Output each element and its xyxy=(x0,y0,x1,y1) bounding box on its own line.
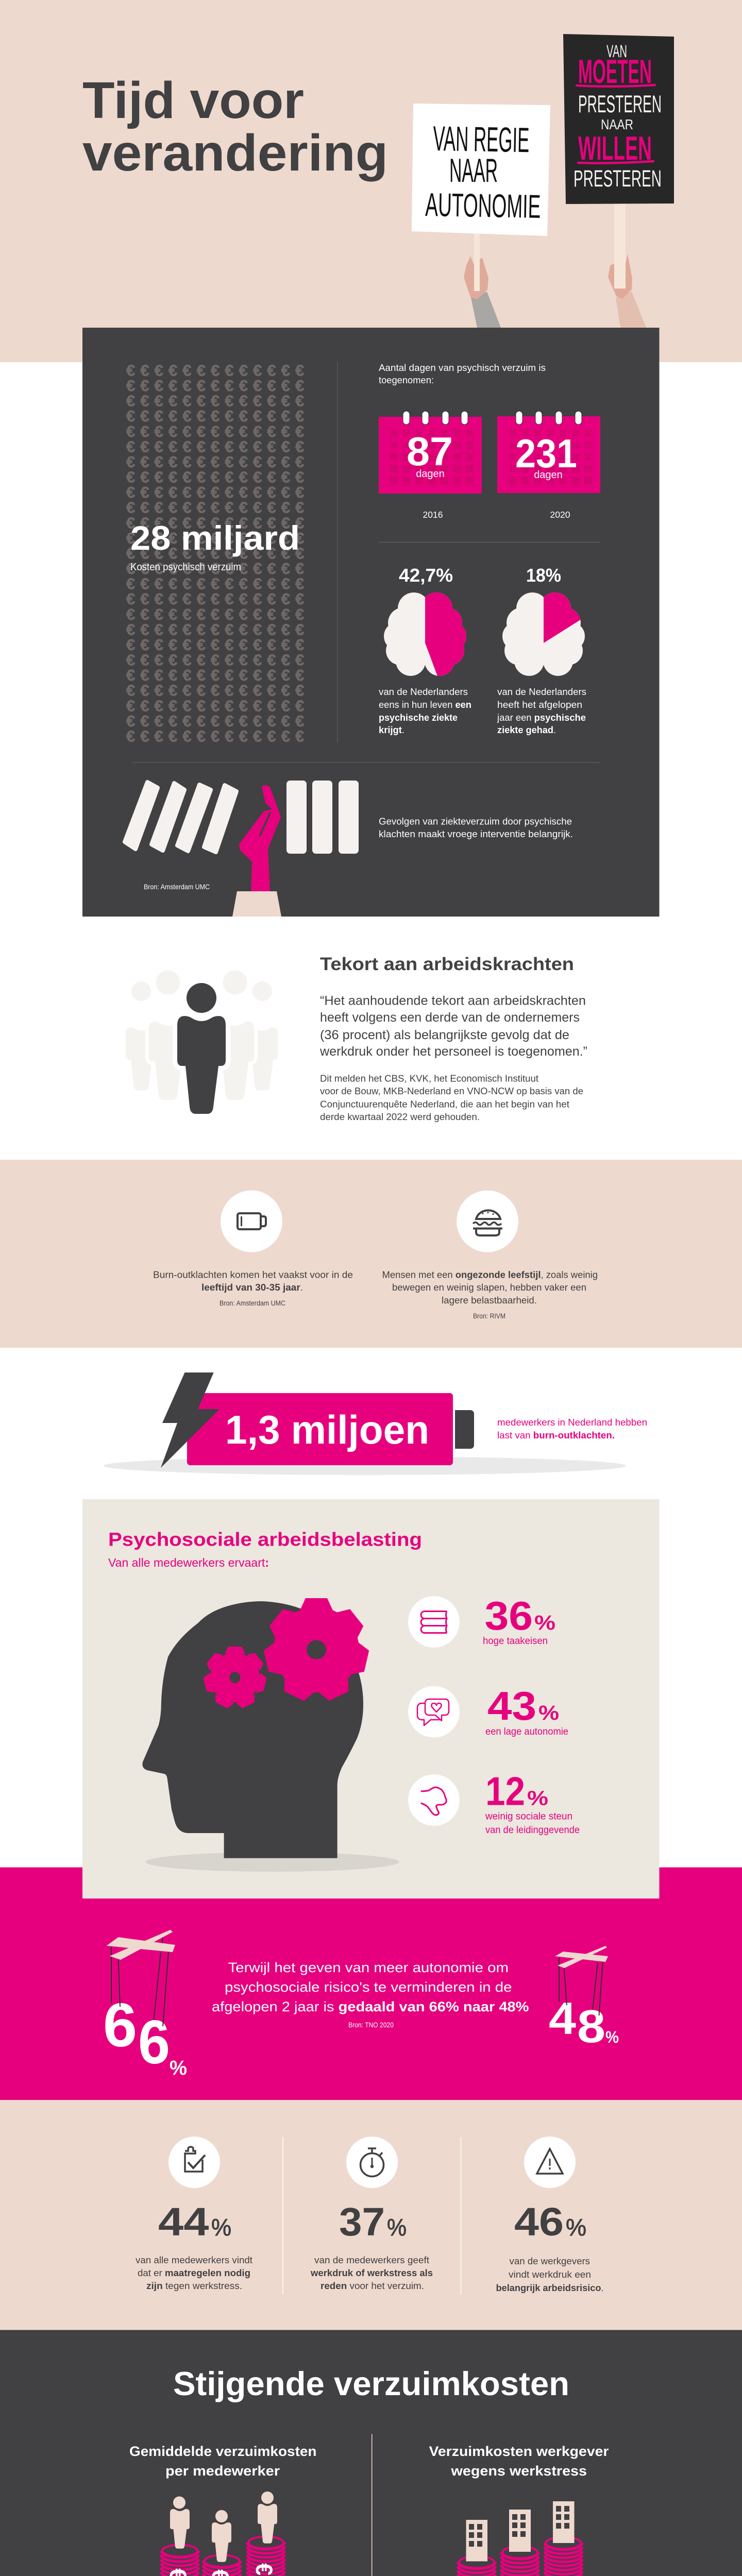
stat: 36% hoge taakeisen: % xyxy=(534,1612,555,1634)
euro pattern: €€€€€€€€€€€€€ xyxy=(126,529,309,547)
calendar years: 2020 xyxy=(550,510,570,520)
small gear xyxy=(203,1647,267,1710)
euro pattern: €€€€€€€€€€€€€ xyxy=(126,422,309,440)
heading: psychosociale arbeidsbelasting: Van alle medewerkers ervaart: xyxy=(108,1556,269,1569)
heading: psychosociale arbeidsbelasting xyxy=(108,1529,422,1569)
header background xyxy=(0,0,742,362)
euro pattern: €€€€€€€€€€€€€ xyxy=(126,682,309,700)
text: gevolgen xyxy=(379,816,573,839)
marionette: 48% xyxy=(549,1946,619,2053)
sign sticks xyxy=(474,204,626,291)
panel: stijgende verzuimkosten xyxy=(0,2330,742,2576)
dark sign xyxy=(563,34,674,204)
euro pattern: €€€€€€€€€€€€€ xyxy=(126,499,309,517)
dark sign: NAAR xyxy=(601,116,633,132)
marionette: 48%: 8 xyxy=(577,2001,605,2053)
euro pattern: €€€€€€€€€€€€€ xyxy=(126,697,309,715)
stat: 37% werkdruk: werkdruk of werkstress als xyxy=(310,2268,433,2278)
heading: kosten werkgever: Verzuimkosten werkgever xyxy=(429,2444,609,2459)
text: autonomie: afgelopen 2 jaar is gedaald van 66% naar 48% xyxy=(212,1999,529,2014)
band: burn-out en leefstijl xyxy=(0,1160,742,1348)
stat: 44% maatregelen: 44 xyxy=(158,2200,209,2244)
cuff xyxy=(232,891,281,917)
stat: 46% arbeidsrisico: 46 xyxy=(514,2200,564,2244)
text: burn-outklachten xyxy=(497,1417,647,1440)
euro pattern xyxy=(126,362,309,745)
icon: books xyxy=(421,1612,447,1633)
text: autonomie xyxy=(212,1960,529,2029)
source: amsterdam umc: Bron: Amsterdam UMC xyxy=(144,883,210,891)
heading: Tekort aan arbeidskrachten xyxy=(320,954,574,974)
brain chart 18% xyxy=(497,569,586,735)
lightning bolt xyxy=(161,1372,220,1468)
euro pattern: €€€€€€€€€€€€€ xyxy=(126,544,309,563)
brain chart 18%: 18% xyxy=(526,565,561,586)
heading: psychosociale arbeidsbelasting: Psychosociale arbeidsbelasting xyxy=(108,1529,422,1550)
euro pattern: €€€€€€€€€€€€€ xyxy=(126,575,309,593)
title xyxy=(82,72,388,182)
white sign: VAN REGIE xyxy=(433,119,530,160)
euro pattern: €€€€€€€€€€€€€ xyxy=(126,468,309,486)
stat: 12% weinig sociale steun xyxy=(408,1768,580,1836)
text: aantal dagen xyxy=(379,363,546,385)
text: autonomie: psychosociale risico's te verminderen in de xyxy=(225,1979,512,1995)
heading: kosten werkgever: wegens werkstress xyxy=(450,2463,587,2479)
brain chart 18%: van de Nederlanders xyxy=(497,687,586,697)
right arm and hand xyxy=(608,254,646,328)
euro pattern: €€€€€€€€€€€€€ xyxy=(126,620,309,638)
icon: building xyxy=(509,2510,531,2552)
stat: 36% hoge taakeisen: 36 xyxy=(484,1593,533,1638)
big gear xyxy=(262,1598,370,1703)
euro pattern: €€€€€€€€€€€€€ xyxy=(126,560,309,578)
chart: coin stack 2016 werkgever xyxy=(458,2520,495,2576)
stat: 36% hoge taakeisen: hoge taakeisen xyxy=(483,1636,548,1647)
stat: 12% weinig sociale steun: 12 xyxy=(485,1768,525,1814)
euro pattern: €€€€€€€€€€€€€ xyxy=(126,651,309,669)
value: 1,3 miljoen xyxy=(225,1407,429,1452)
stat: 44% maatregelen xyxy=(136,2137,252,2291)
stat: 37% werkdruk: van de medewerkers geeft xyxy=(314,2255,429,2265)
stat: 12% weinig sociale steun: % xyxy=(527,1787,548,1809)
stat: 44% maatregelen: van alle medewerkers vindt xyxy=(136,2255,252,2265)
body text: Dit melden het CBS, KVK, het Economisch Instituut xyxy=(320,1073,538,1084)
body text: derde kwartaal 2022 werd gehouden. xyxy=(320,1111,480,1122)
stat: 37% werkdruk: 37 xyxy=(339,2200,385,2244)
quote: (36 procent) als belangrijkste gevolg dat de xyxy=(320,1028,569,1042)
card: ongezonde leefstijl: lagere belastbaarheid. xyxy=(442,1295,537,1306)
illustration: burn-out battery xyxy=(104,1372,626,1475)
stat: 43% lage autonomie xyxy=(408,1683,568,1737)
stat: 46% arbeidsrisico: belangrijk arbeidsrisico. xyxy=(496,2283,604,2293)
title: Tijd voor xyxy=(82,72,304,129)
euro pattern: €€€€€€€€€€€€€ xyxy=(126,407,309,425)
card: ongezonde leefstijl: bewegen en weinig slapen, hebben vaker een xyxy=(392,1282,586,1293)
text: aantal dagen: Aantal dagen van psychisch verzuim is xyxy=(379,363,546,373)
battery body xyxy=(187,1393,453,1465)
euro pattern: €€€€€€€€€€€€€ xyxy=(126,483,309,501)
icon: building xyxy=(466,2520,487,2562)
card: burn-out leeftijd: leeftijd van 30-35 jaar . xyxy=(201,1282,303,1293)
icon: thumb down xyxy=(421,1787,446,1815)
card: ongezonde leefstijl xyxy=(382,1190,598,1320)
band: magenta xyxy=(0,1867,742,2100)
text: aantal dagen: toegenomen: xyxy=(379,375,434,385)
euro pattern: €€€€€€€€€€€€€ xyxy=(126,605,309,623)
chart: coin stack 2018 medewerker xyxy=(247,2492,284,2576)
euro pattern: €€€€€€€€€€€€€ xyxy=(126,590,309,608)
white sign xyxy=(412,104,550,236)
card: burn-out leeftijd xyxy=(153,1190,353,1307)
calendar years xyxy=(423,510,570,520)
stat: 12% weinig sociale steun: weinig sociale steun xyxy=(485,1811,572,1822)
calendar 2016: dagen xyxy=(416,468,445,480)
icon: chat bubbles with heart xyxy=(417,1699,449,1725)
section: tekort aan arbeidskrachten xyxy=(319,954,587,1122)
stat: 28 miljard xyxy=(130,519,300,573)
marionette: 48%: % xyxy=(605,2028,619,2046)
quote: werkdruk onder het personeel is toegenomen.” xyxy=(319,1044,587,1059)
text: burn-outklachten: medewerkers in Nederland hebben xyxy=(497,1417,647,1428)
brain chart 42,7%: psychische ziekte xyxy=(379,713,458,723)
shadow xyxy=(104,1456,626,1475)
heading: kosten per medewerker xyxy=(129,2444,316,2479)
brain chart 18%: ziekte gehad. xyxy=(497,725,556,735)
stat: 46% arbeidsrisico: % xyxy=(566,2214,586,2241)
stat: 44% maatregelen: % xyxy=(211,2214,231,2241)
card: burn-out leeftijd: Bron: Amsterdam UMC xyxy=(220,1299,285,1307)
text: autonomie: Terwijl het geven van meer autonomie om xyxy=(228,1960,509,1975)
hand xyxy=(240,786,280,891)
calendar 2016 xyxy=(379,411,482,494)
stat: 37% werkdruk: % xyxy=(387,2214,407,2241)
chart: coin stack 2017 medewerker xyxy=(203,2510,240,2576)
chart: coin stack 2016 medewerker xyxy=(161,2497,198,2576)
stat: 43% lage autonomie: % xyxy=(538,1702,559,1724)
brain chart 18%: heeft het afgelopen xyxy=(497,700,582,710)
text: gevolgen: klachten maakt vroege interventie belangrijk. xyxy=(379,829,573,839)
stat: 43% lage autonomie: 43 xyxy=(487,1683,536,1728)
calendar 2020 xyxy=(497,411,600,493)
euro pattern: €€€€€€€€€€€€€ xyxy=(126,377,309,395)
panel: psychisch verzuim xyxy=(82,328,660,917)
body text xyxy=(320,1073,583,1122)
card: burn-out leeftijd: Burn-outklachten komen het vaakst voor in de xyxy=(153,1269,353,1280)
stat: 43% lage autonomie: een lage autonomie xyxy=(485,1726,568,1737)
title: verandering xyxy=(82,124,388,182)
dark sign: PRESTEREN xyxy=(578,90,662,117)
dark sign: PRESTEREN xyxy=(574,165,662,192)
euro pattern: €€€€€€€€€€€€€ xyxy=(126,453,309,471)
white sign: NAAR xyxy=(449,151,498,189)
stat: 46% arbeidsrisico: van de werkgevers xyxy=(509,2256,590,2266)
heading: kosten per medewerker: Gemiddelde verzuimkosten xyxy=(129,2444,316,2459)
marionette: 66%: 6 xyxy=(138,2008,170,2077)
icon: building xyxy=(553,2501,574,2543)
euro pattern: €€€€€€€€€€€€€ xyxy=(126,636,309,654)
brain chart 42,7%: van de Nederlanders xyxy=(379,687,468,697)
euro pattern: €€€€€€€€€€€€€ xyxy=(126,727,309,745)
stat: 12% weinig sociale steun: van de leidinggevende xyxy=(485,1825,580,1836)
quote: “Het aanhoudende tekort aan arbeidskrachten xyxy=(320,993,586,1008)
dark sign: VAN xyxy=(606,42,627,61)
icon: group of people xyxy=(126,971,278,1114)
panel: psychosociale arbeidsbelasting xyxy=(82,1499,660,1899)
left arm and hand xyxy=(464,256,501,328)
heading: stijgende verzuimkosten: Stijgende verzuimkosten xyxy=(173,2365,569,2402)
battery nub xyxy=(455,1410,474,1449)
text: burn-outklachten: last van burn-outklachten. xyxy=(497,1430,615,1440)
stat: 28 miljard: Kosten psychisch verzuim xyxy=(130,562,241,573)
white sign: AUTONOMIE xyxy=(425,186,541,225)
body text: Conjunctuurenquête Nederland, die aan het begin van het xyxy=(320,1098,569,1110)
stat: 46% arbeidsrisico xyxy=(496,2137,604,2293)
brain chart 42,7%: eens in hun leven een xyxy=(379,700,471,710)
quote: heeft volgens een derde van de ondernemers xyxy=(320,1010,580,1025)
icon: warning triangle xyxy=(537,2149,563,2174)
marionette: 66% xyxy=(103,1930,187,2079)
euro pattern: €€€€€€€€€€€€€ xyxy=(126,437,309,455)
brain chart 42,7%: krijgt. xyxy=(379,725,404,735)
card: ongezonde leefstijl: Bron: RIVM xyxy=(473,1312,505,1320)
illustration: head with gears xyxy=(142,1598,399,1872)
illustration: dominoes with hand xyxy=(125,781,359,917)
body text: voor de Bouw, MKB-Nederland en VNO-NCW op basis van de xyxy=(320,1086,583,1096)
euro pattern: €€€€€€€€€€€€€ xyxy=(126,514,309,532)
quote xyxy=(319,993,587,1059)
calendar 2020: dagen xyxy=(534,469,563,481)
chart: coin stack 2018 werkgever xyxy=(545,2501,582,2576)
icon: clipboard xyxy=(185,2147,205,2172)
text: autonomie: Bron: TNO 2020 xyxy=(348,2021,394,2029)
heading: kosten per medewerker: per medewerker xyxy=(165,2463,280,2479)
brain chart 42,7% xyxy=(379,569,471,735)
brain chart 42,7%: 42,7% xyxy=(399,565,453,586)
falling dominoes xyxy=(125,782,237,852)
text: gevolgen: Gevolgen van ziekteverzuim door psychische xyxy=(379,816,572,826)
marionette: 66%: % xyxy=(170,2057,187,2079)
band: werkstress xyxy=(0,2100,742,2330)
icon: stopwatch xyxy=(361,2148,383,2176)
protest signs with hands xyxy=(412,34,674,328)
stat: 44% maatregelen: zijn tegen werkstress. xyxy=(146,2281,242,2291)
card: ongezonde leefstijl: Mensen met een ongezonde leefstijl, zoals weinig xyxy=(382,1269,598,1280)
chart: coin stack 2017 werkgever xyxy=(501,2510,538,2576)
marionette: 48%: 4 xyxy=(549,1993,576,2044)
stat: 37% werkdruk: reden voor het verzuim. xyxy=(321,2281,424,2291)
stat: 37% werkdruk xyxy=(310,2137,433,2291)
stat: 46% arbeidsrisico: vindt werkdruk een xyxy=(509,2269,591,2280)
calendar years: 2016 xyxy=(423,510,443,520)
heading: kosten werkgever xyxy=(429,2444,609,2479)
euro pattern: €€€€€€€€€€€€€ xyxy=(126,712,309,730)
brain chart 18%: jaar een psychische xyxy=(497,713,586,723)
stat: 28 miljard: 28 miljard xyxy=(130,519,300,557)
icon: burger xyxy=(473,1210,502,1235)
stat: 36% hoge taakeisen xyxy=(408,1593,555,1648)
euro pattern: €€€€€€€€€€€€€ xyxy=(126,666,309,684)
euro pattern: €€€€€€€€€€€€€ xyxy=(126,392,309,410)
dark sign: MOETEN xyxy=(578,53,652,90)
upright dominoes xyxy=(286,781,359,854)
calendar 2016: 87 xyxy=(407,429,453,474)
marionette: 66%: 6 xyxy=(103,1991,137,2060)
dark sign: WILLEN xyxy=(578,129,652,167)
icon: empty battery xyxy=(238,1213,266,1229)
calendar 2020: 231 xyxy=(515,431,577,476)
stat: 44% maatregelen: dat er maatregelen nodig xyxy=(138,2268,250,2278)
euro pattern: €€€€€€€€€€€€€ xyxy=(126,362,309,379)
